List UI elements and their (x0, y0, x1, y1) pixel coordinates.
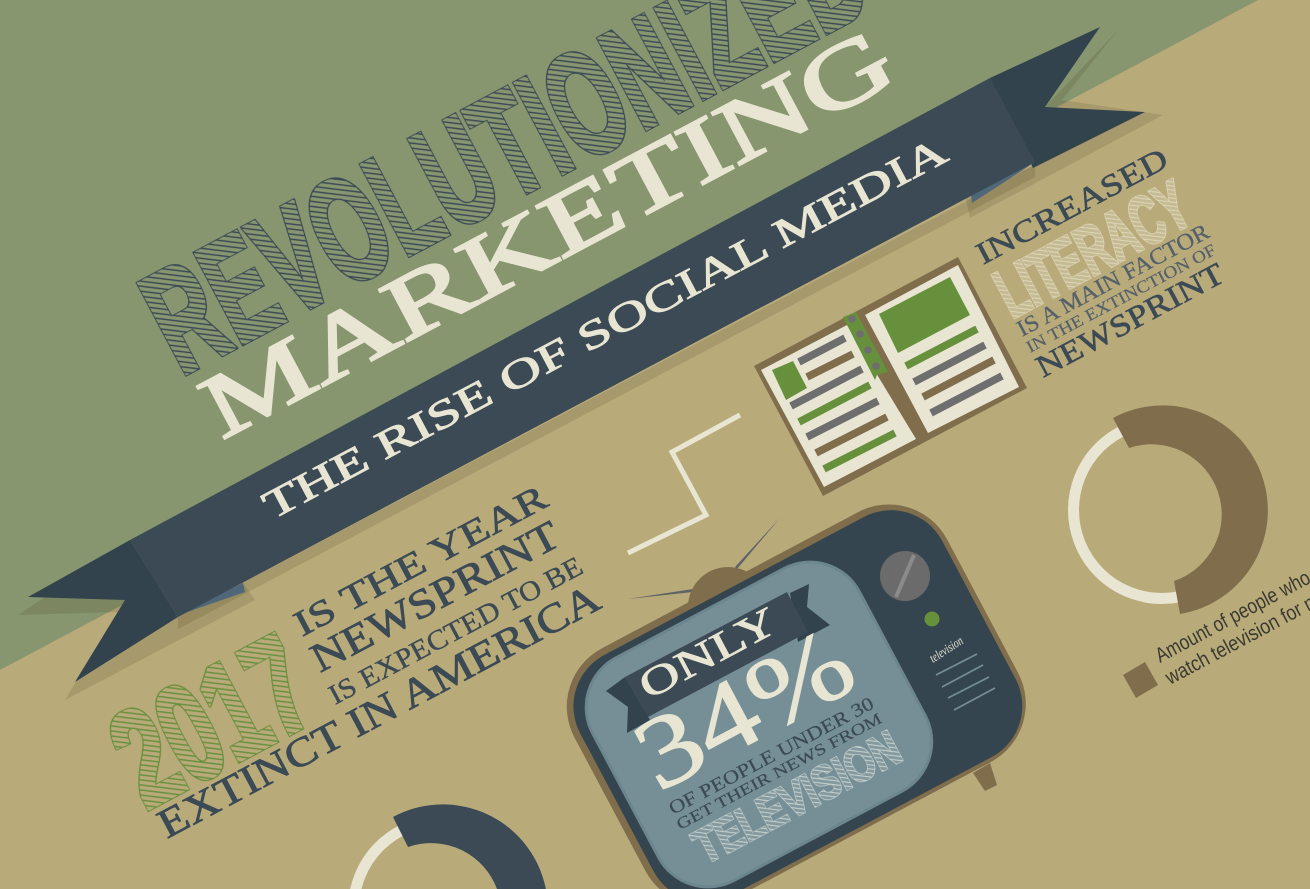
television word: TELEVISION (685, 722, 910, 875)
connector line (628, 415, 740, 553)
ribbon band (130, 78, 1035, 617)
antenna dome (688, 567, 768, 647)
donut chart: television (1074, 405, 1268, 614)
bookmark (843, 312, 888, 380)
only text: ONLY (631, 598, 785, 708)
green upper background (0, 0, 1258, 670)
year 2017: 2017 (88, 607, 337, 836)
antenna left (628, 589, 693, 599)
get their news from: GET THEIR NEWS FROM (674, 711, 885, 834)
in the extinction of: IN THE EXTINCTION OF (1023, 240, 1219, 357)
thin ring (1074, 422, 1250, 598)
right page text bars (906, 329, 1002, 413)
literacy text block (970, 141, 1230, 384)
ribbon right tail (990, 27, 1145, 168)
right page image (879, 277, 970, 353)
thin ring (354, 820, 530, 889)
tv outer casing (544, 481, 1049, 889)
thick segment (1113, 405, 1268, 614)
tv dark body (553, 490, 1043, 889)
tv screen (566, 542, 951, 889)
tv knob (880, 551, 930, 601)
of people under 30: OF PEOPLE UNDER 30 (665, 693, 878, 819)
ribbon left fold (173, 583, 245, 617)
ribbon left tail (28, 540, 178, 682)
is a main factor: IS A MAIN FACTOR (1013, 219, 1214, 341)
newsprint: NEWSPRINT (303, 511, 567, 681)
tv foot (973, 763, 997, 791)
extinct in america: EXTINCT IN AMERICA (150, 574, 608, 847)
left page (761, 325, 916, 487)
thick segment (393, 804, 548, 889)
legend swatch (1123, 662, 1158, 698)
ribbon subtitle: THE RISE OF SOCIAL MEDIA (255, 128, 954, 528)
newsprint: NEWSPRINT (1030, 256, 1230, 384)
only ribbon (606, 584, 830, 733)
book cover (754, 257, 1027, 496)
ribbon right fold (970, 162, 1035, 203)
title: Marketing: MARKETING (185, 10, 909, 458)
tv power light (924, 612, 940, 626)
legend: television (1123, 566, 1310, 698)
tv speaker lines (936, 654, 995, 710)
right page (865, 265, 1019, 433)
icon: television (544, 481, 1049, 889)
donut chart: bottom (354, 804, 548, 889)
tv brand label: television (926, 633, 966, 666)
2017 text block (88, 477, 608, 847)
ribbon banner (18, 27, 1163, 700)
34 percent: 34% (616, 605, 873, 813)
is the year: IS THE YEAR (287, 477, 554, 644)
ribbon shadow (18, 30, 1163, 700)
is expected to be: IS EXPECTED TO BE (324, 551, 588, 711)
increased: INCREASED (970, 141, 1173, 271)
antenna right (735, 518, 780, 569)
left page text bars (791, 338, 895, 469)
left page image (772, 361, 807, 400)
icon: open book (754, 257, 1027, 496)
